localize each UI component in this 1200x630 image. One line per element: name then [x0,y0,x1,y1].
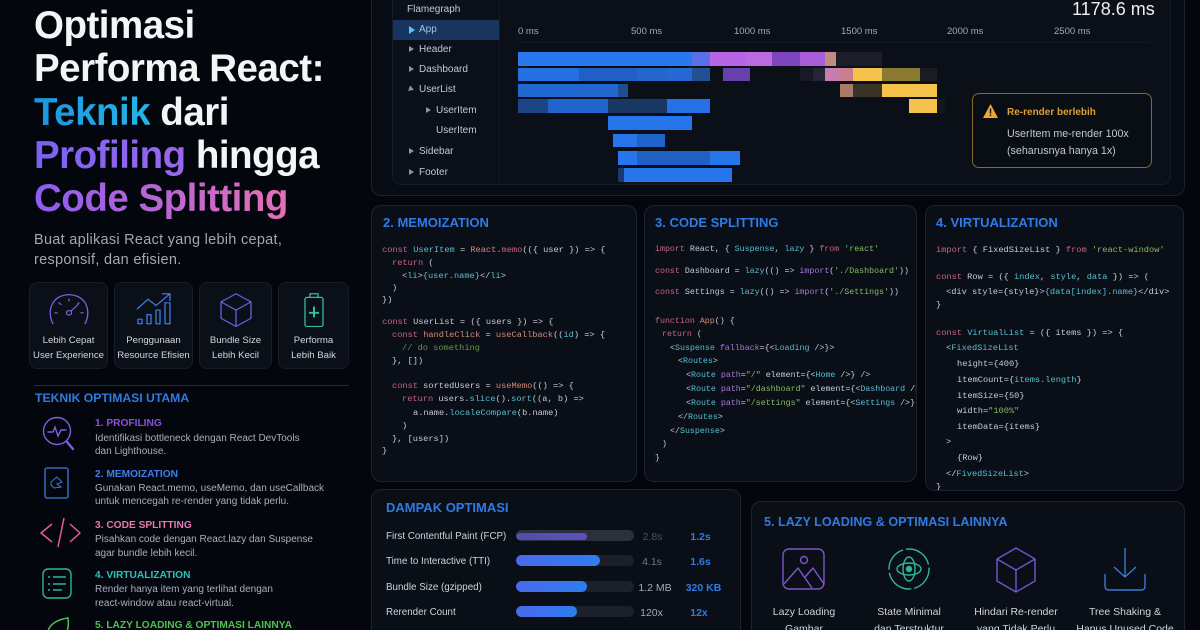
title: Profiling hingga [34,134,319,177]
code block [655,244,916,463]
technique 3: 3. CODE SPLITTING [95,520,192,531]
code block: }) [382,295,392,305]
technique 1: dan Lighthouse. [95,446,166,457]
time axis: 1000 ms [734,26,770,37]
metric: FCP: First Contentful Paint (FCP) [386,531,506,542]
code block: import React, { Suspense, lazy } from 'react' [655,244,879,254]
time axis: 500 ms [631,26,662,37]
panel: memoization [371,205,637,482]
component tree: Dashboard [419,64,468,75]
tip: avoid rerender: Hindari Re-render [974,606,1058,618]
code block: > [946,437,951,447]
technique 5 [48,617,292,630]
metric: TTI: Time to Interactive (TTI) [386,556,490,567]
title: Optimasi [34,4,195,47]
code block: // do something [402,343,480,353]
technique 4: react-window atau react-virtual. [95,598,234,609]
benefit card: bundle [199,282,272,369]
time axis: 2000 ms [947,26,983,37]
component tree: UserItem [436,105,477,116]
subtitle [34,232,282,268]
code block: itemData={items} [957,422,1040,432]
technique 2: untuk mencegah re-render yang tidak perlu. [95,496,289,507]
code block: <FixedSizeList [946,342,1019,352]
code block: }, []) [392,356,423,366]
title: Teknik dari [34,91,229,134]
code block: const Dashboard = lazy(() => import('./Dashboard')) [655,266,909,276]
benefit card: resource: Penggunaan [126,335,181,346]
warning callout: Re-render berlebih [1007,107,1096,118]
technique 1: 1. PROFILING [95,418,162,429]
heading: 4. VIRTUALIZATION [936,215,1058,230]
code block [382,244,605,456]
code block: </FivedSizeList> [946,468,1029,478]
component tree: Footer [419,167,448,178]
tip: tree shaking: Tree Shaking & [1089,606,1161,618]
app row highlight [393,20,499,40]
heading: DAMPAK OPTIMASI [386,500,509,515]
code block: itemSize={50} [957,390,1025,400]
component tree: UserItem [436,125,477,136]
technique 2 [44,467,324,507]
icon: warning [983,104,998,118]
code block: <li>{user.name}</li> [402,270,506,280]
code block: </Routes> [678,412,723,422]
title: Code Splitting [34,177,288,220]
technique 3: agar bundle lebih kecil. [95,548,197,559]
benefit card: faster UX: Lebih Cepat [43,335,94,346]
technique 4 [42,568,273,609]
code block: <Routes> [678,357,718,366]
metric: rerender count: Rerender Count [386,607,456,618]
code block: const UserList = ({ users }) => { [382,317,553,327]
technique 3 [40,518,313,559]
panel: dampak optimasi [371,489,741,630]
code block: ) [662,440,667,449]
warning callout: UserItem me-render 100x [1007,128,1129,140]
code block: return users.slice().sort((a, b) => [402,394,584,404]
title: Performa React: [34,47,324,90]
heading: 5. LAZY LOADING & OPTIMASI LAINNYA [764,515,1008,529]
heading: 3. CODE SPLITTING [655,215,779,230]
tip: tree shaking [1076,548,1174,630]
code block: const Settings = lazy(() => import('./Settings')) [655,288,899,297]
warning callout: (seharusnya hanya 1x) [1007,145,1116,157]
benefit card: resource [114,282,193,369]
subtitle: responsif, dan efisien. [34,252,182,268]
benefit card: bundle: Bundle Size [210,335,261,346]
benefit card: battery: Performa [294,335,333,346]
code block: a.name.localeCompare(b.name) [413,408,558,418]
code block: ) [402,421,407,431]
technique 4: Render hanya item yang terlihat dengan [95,584,273,595]
technique 1 [42,416,300,457]
component tree: Flamegraph [407,4,460,15]
code block: itemCount={items.length} [957,374,1082,384]
panel: code splitting [644,205,917,482]
time axis: 0 ms [518,26,539,37]
code block: } [655,454,660,463]
flame bars [518,52,937,182]
component tree [407,4,477,178]
component tree: UserList [419,84,456,95]
code block: const Row = ({ index, style, data }) => ( [936,272,1149,282]
metric: FCP: 1.2s [690,531,711,543]
code block: const sortedUsers = useMemo(() => { [392,380,574,390]
tip: lazy image [773,548,835,630]
code block: function App() { [655,316,735,326]
code block: } [936,300,941,310]
code block: <Suspense fallback={<Loading />}> [670,344,834,352]
benefit card: resource: Resource Efisien [117,350,190,361]
technique 1: Identifikasi bottleneck dengan React DevTools [95,432,300,444]
metric: bundle size: Bundle Size (gzipped) [386,582,482,593]
metric: bundle size [386,581,721,594]
code block: } [382,446,387,456]
metric: bundle size: 1.2 MB [638,582,672,594]
tip: state: State Minimal [877,606,941,618]
code block: </Suspense> [670,426,725,436]
code block: import { FixedSizeList } from 'react-window' [936,244,1165,254]
code block: height={400} [957,358,1019,368]
metric: rerender count [386,606,708,619]
metric: FCP [386,530,711,543]
technique 2: Gunakan React.memo, useMemo, dan useCallback [95,483,324,494]
benefit card: faster UX [29,282,108,369]
title [34,4,324,220]
profiler inner window [392,0,1171,185]
metric: TTI: 4.1s [642,556,662,568]
technique 4: 4. VIRTUALIZATION [95,570,190,581]
code block: {Row} [957,453,983,463]
component tree: App [419,24,437,35]
metric: TTI [386,555,711,568]
benefit card: battery: Lebih Baik [291,350,336,361]
metric: bundle size: 320 KB [686,582,721,594]
time axis: 1500 ms [841,26,877,37]
code block [936,244,1169,491]
code block: ) [392,283,397,293]
tip: lazy image: Lazy Loading [773,606,835,618]
time axis [518,26,1090,37]
benefit card: battery [278,282,349,369]
panel: virtualization [925,205,1184,491]
code block: return ( [392,258,434,268]
benefit card: bundle: Lebih Kecil [212,350,259,361]
subtitle: Buat aplikasi React yang lebih cepat, [34,232,282,248]
metric: rerender count: 12x [690,607,708,619]
code block: <Route path="/" element={<Home />} /> [686,371,870,380]
panel: lazy loading [751,501,1185,630]
code block: const VirtualList = ({ items }) => { [936,328,1123,338]
component tree: Sidebar [419,146,453,157]
metric: TTI: 1.6s [690,556,711,568]
tip: avoid rerender [974,547,1058,630]
metric: FCP: 2.8s [643,531,662,543]
metric: rerender count: 120x [640,607,663,619]
time axis: 2500 ms [1054,26,1090,37]
code block: width="100%" [957,406,1019,416]
technique 2: 2. MEMOIZATION [95,469,178,480]
benefit card: faster UX: User Experience [33,350,104,361]
code block: const UserItem = React.memo(({ user }) => { [382,244,605,254]
heading: 2. MEMOIZATION [383,215,489,230]
code block: return ( [662,330,702,339]
component tree: Header [419,44,452,55]
code block: const handleClick = useCallback((id) => { [392,330,605,340]
code block: }, [users]) [392,434,449,444]
section heading: teknik: TEKNIK OPTIMASI UTAMA [35,391,189,405]
warning callout [972,93,1152,168]
technique 3: Pisahkan code dengan React.lazy dan Suspense [95,534,313,545]
tip: state [874,548,944,630]
code block: <div style={style}>{data[index].name}</div> [946,286,1169,296]
panel: profiler flamegraph [371,0,1185,196]
